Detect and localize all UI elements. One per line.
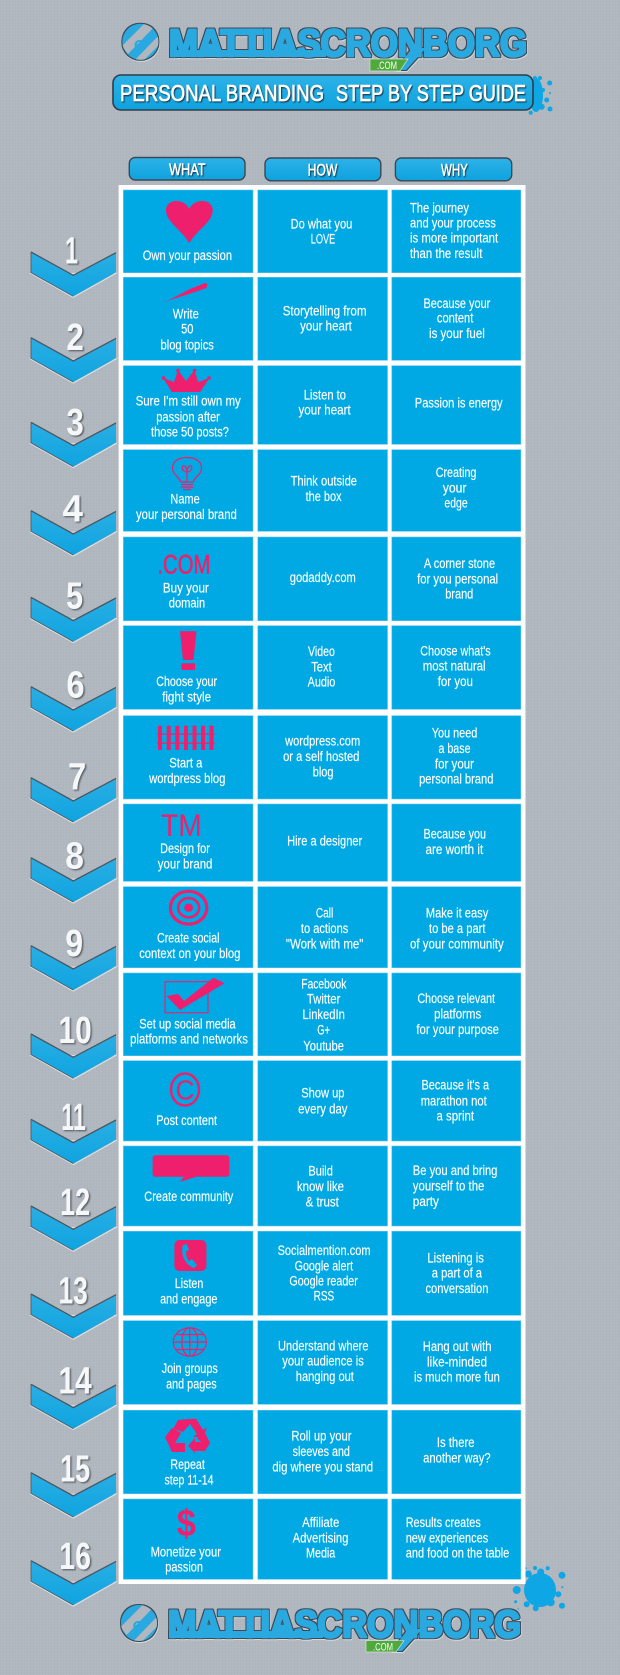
icon: crown xyxy=(162,369,211,392)
chevron 4 xyxy=(31,511,116,556)
why cell xyxy=(392,716,521,799)
how cell xyxy=(258,804,388,881)
how cell xyxy=(258,537,388,621)
column header: why: WHY xyxy=(441,162,468,180)
how cell: the box xyxy=(306,489,342,504)
what cell: domain xyxy=(169,596,205,611)
icon: heart xyxy=(166,201,213,243)
how cell: Youtube xyxy=(303,1039,344,1054)
why cell: for you personal xyxy=(417,571,498,586)
icon: pen stroke xyxy=(162,283,208,304)
why cell: Make it easy xyxy=(426,906,489,921)
how cell: sleeves and xyxy=(293,1444,350,1459)
how cell xyxy=(258,450,388,531)
number 6: 6 xyxy=(66,664,85,706)
how cell: Roll up your xyxy=(291,1429,352,1444)
why cell: is more important xyxy=(410,231,498,246)
how cell xyxy=(258,366,388,444)
icon: globe xyxy=(173,1328,206,1356)
how cell xyxy=(258,973,388,1056)
what cell: and pages xyxy=(166,1376,217,1391)
what cell: fight style xyxy=(162,690,211,704)
why cell: Is there xyxy=(437,1435,474,1450)
what cell: 50 xyxy=(181,322,193,337)
step 6 xyxy=(31,626,521,732)
why cell: Passion is energy xyxy=(415,395,503,410)
why cell xyxy=(392,366,521,444)
how cell: Build xyxy=(308,1164,333,1179)
what cell xyxy=(123,973,253,1056)
number 16: 16 xyxy=(59,1536,91,1578)
why cell: yourself to the xyxy=(413,1178,484,1193)
what cell: Name xyxy=(170,491,200,506)
icon: exclamation mark xyxy=(180,631,196,670)
how cell: Call xyxy=(316,905,333,920)
why cell: for your xyxy=(435,756,474,771)
how cell xyxy=(258,887,388,968)
number 14: 14 xyxy=(58,1360,92,1402)
step 10 xyxy=(31,973,521,1079)
what cell: Set up social media xyxy=(139,1016,236,1031)
bottom splash xyxy=(513,1566,566,1611)
what cell xyxy=(123,1321,253,1404)
step 4 xyxy=(31,450,521,556)
what cell xyxy=(123,1231,253,1315)
icon: dollar sign: $ xyxy=(177,1503,196,1545)
why cell: Choose relevant xyxy=(418,991,495,1006)
icon: TM: TM xyxy=(161,808,202,843)
why cell: to be a part xyxy=(429,921,486,936)
why cell: Results creates xyxy=(406,1515,481,1530)
why cell: Be you and bring xyxy=(413,1163,497,1178)
why cell: edge xyxy=(444,496,468,511)
how cell xyxy=(258,1410,388,1494)
chevron 7 xyxy=(31,778,116,823)
column header: what xyxy=(129,158,245,180)
how cell: Do what you xyxy=(291,216,352,231)
what cell: Post content xyxy=(156,1113,217,1128)
what cell: Start a xyxy=(169,755,203,770)
logo: bottom xyxy=(121,1599,521,1654)
why cell xyxy=(392,804,521,881)
how cell: Socialmention.com xyxy=(278,1243,370,1258)
title banner xyxy=(113,75,533,110)
how cell: hanging out xyxy=(296,1369,354,1384)
title text: STEP BY STEP GUIDE xyxy=(336,80,526,106)
how cell: your heart xyxy=(300,319,352,334)
why cell: new experiences xyxy=(406,1530,489,1545)
why cell: platforms xyxy=(434,1007,481,1022)
why cell: A corner stone xyxy=(424,556,495,571)
why cell: a sprint xyxy=(436,1108,474,1123)
logo .com badge xyxy=(370,59,408,72)
how cell: Hire a designer xyxy=(287,834,363,849)
how cell: Audio xyxy=(308,675,335,690)
number 2: 2 xyxy=(66,317,84,359)
how cell xyxy=(258,1231,388,1315)
what cell: Buy your xyxy=(163,580,209,595)
chevron 11 xyxy=(31,1119,116,1165)
why cell: conversation xyxy=(426,1281,488,1296)
what cell: Listen xyxy=(175,1276,203,1291)
what cell: platforms and networks xyxy=(130,1032,248,1047)
title text: PERSONAL BRANDING xyxy=(120,80,324,106)
how cell: your heart xyxy=(298,403,351,418)
how cell: Show up xyxy=(301,1085,344,1100)
what cell: passion after xyxy=(156,409,220,424)
why cell: Because you xyxy=(424,827,486,842)
why cell xyxy=(392,537,521,621)
how cell: Storytelling from xyxy=(283,303,366,318)
logo .com badge: .COM xyxy=(373,1642,393,1654)
how cell: to actions xyxy=(301,921,348,936)
icon: checkbox xyxy=(165,978,225,1013)
how cell: G+ xyxy=(317,1022,330,1037)
step 15 xyxy=(31,1410,521,1518)
what cell: Own your passion xyxy=(143,248,232,263)
what cell: Choose your xyxy=(156,674,217,689)
chevron 6 xyxy=(31,687,116,732)
how cell: RSS xyxy=(314,1289,334,1304)
why cell: for you xyxy=(438,674,473,689)
chevron 8 xyxy=(31,858,116,903)
how cell: Affiliate xyxy=(302,1515,339,1530)
chevron 15 xyxy=(31,1473,116,1518)
logo icon xyxy=(120,1604,158,1643)
what cell xyxy=(123,887,253,968)
why cell xyxy=(392,1410,521,1494)
how cell: Video xyxy=(308,644,335,659)
what cell xyxy=(123,804,253,881)
what cell: your brand xyxy=(158,856,212,871)
logo wordmark: MATTIASCRONBORG xyxy=(169,23,527,65)
how cell: blog xyxy=(313,764,333,779)
why cell xyxy=(392,1321,521,1404)
number 4: 4 xyxy=(62,489,83,531)
how cell: wordpress.com xyxy=(284,734,360,749)
why cell: content xyxy=(437,311,473,326)
how cell: & trust xyxy=(306,1194,339,1209)
why cell xyxy=(392,973,521,1056)
number 5: 5 xyxy=(66,575,83,617)
number 1: 1 xyxy=(65,230,78,272)
step 8 xyxy=(31,804,521,903)
what cell: Write xyxy=(173,307,199,322)
number 10: 10 xyxy=(58,1010,92,1052)
what cell: your personal brand xyxy=(136,507,237,522)
how cell: Google alert xyxy=(295,1258,353,1273)
why cell: like-minded xyxy=(427,1354,487,1369)
what cell xyxy=(123,1061,253,1141)
how cell xyxy=(258,277,388,360)
logo .com badge: .COM xyxy=(377,60,397,72)
number 15: 15 xyxy=(60,1449,90,1491)
why cell: Because your xyxy=(424,296,491,311)
what cell: context on your blog xyxy=(139,946,240,961)
what cell: those 50 posts? xyxy=(151,424,229,439)
logo icon: G xyxy=(134,37,146,54)
step 14 xyxy=(31,1321,521,1430)
how cell: know like xyxy=(297,1179,344,1194)
icon: light bulb xyxy=(172,458,202,490)
why cell xyxy=(392,887,521,968)
why cell: Choose what's xyxy=(420,643,491,658)
icon: .COM: .COM xyxy=(157,549,210,579)
logo wordmark: MATTIASCRONBORG xyxy=(168,1604,521,1646)
why cell: marathon not xyxy=(421,1093,487,1108)
title splash xyxy=(529,76,552,115)
how cell: Google reader xyxy=(289,1274,358,1289)
what cell: Repeat xyxy=(170,1457,205,1472)
how cell: LinkedIn xyxy=(302,1007,345,1022)
what cell xyxy=(123,1410,253,1494)
how cell: Understand where xyxy=(278,1338,368,1353)
what cell xyxy=(123,716,253,799)
why cell xyxy=(392,1061,521,1141)
title text xyxy=(120,80,526,106)
why cell: is your fuel xyxy=(429,326,485,341)
column header: why xyxy=(395,158,512,181)
what cell: and engage xyxy=(160,1291,217,1306)
why cell: is much more fun xyxy=(414,1370,500,1385)
why cell: Because it's a xyxy=(422,1078,489,1093)
chevron 9 xyxy=(31,946,116,991)
chevron 12 xyxy=(31,1206,116,1251)
logo icon xyxy=(121,22,160,62)
how cell xyxy=(258,626,388,709)
what cell xyxy=(123,537,253,621)
why cell: for your purpose xyxy=(416,1022,499,1037)
chevron 13 xyxy=(31,1294,116,1339)
chevron 3 xyxy=(31,422,116,468)
step 9 xyxy=(31,887,521,991)
why cell: personal brand xyxy=(419,772,493,787)
how cell xyxy=(258,190,388,273)
number 9: 9 xyxy=(65,923,83,965)
step 3 xyxy=(31,366,521,468)
what cell: Create social xyxy=(157,931,220,946)
what cell: Join groups xyxy=(162,1361,218,1376)
why cell: brand xyxy=(445,587,473,602)
why cell: Listening is xyxy=(427,1250,484,1265)
why cell: your xyxy=(443,480,467,495)
step 5 xyxy=(31,537,521,643)
number 3: 3 xyxy=(66,402,84,444)
icon: rail of bars xyxy=(157,726,215,750)
how cell xyxy=(258,1321,388,1404)
chevron 1 xyxy=(31,252,116,297)
why cell: The journey xyxy=(410,200,469,215)
column header: how xyxy=(265,158,381,181)
how cell xyxy=(258,1499,388,1579)
why cell: another way? xyxy=(423,1450,491,1465)
why cell: are worth it xyxy=(426,842,483,857)
number 12: 12 xyxy=(60,1182,90,1224)
step 16 xyxy=(31,1499,521,1606)
what cell: Sure I'm still own my xyxy=(136,394,241,409)
logo icon: G xyxy=(133,1618,144,1635)
icon: target xyxy=(170,891,207,924)
why cell xyxy=(392,1146,521,1226)
icon: copyright: C xyxy=(176,1074,194,1106)
how cell: Media xyxy=(306,1546,336,1561)
chevron 5 xyxy=(31,597,116,643)
logo: top xyxy=(122,18,527,72)
number 7: 7 xyxy=(68,756,86,798)
how cell: godaddy.com xyxy=(290,570,356,585)
what cell: Monetize your xyxy=(151,1544,221,1559)
how cell: Advertising xyxy=(293,1530,348,1545)
how cell: Twitter xyxy=(307,992,341,1007)
chevron 10 xyxy=(31,1034,116,1079)
icon: recycle xyxy=(165,1418,210,1453)
what cell xyxy=(123,450,253,531)
why cell: a part of a xyxy=(432,1266,482,1281)
what cell xyxy=(123,277,253,360)
step 11 xyxy=(31,1061,521,1165)
why cell xyxy=(392,277,521,360)
what cell: wordpress blog xyxy=(148,771,225,786)
why cell: party xyxy=(413,1194,439,1209)
column header: how: HOW xyxy=(308,162,338,180)
chevron 14 xyxy=(31,1384,116,1430)
why cell: You need xyxy=(432,725,477,740)
what cell xyxy=(123,190,253,273)
how cell xyxy=(258,716,388,799)
why cell xyxy=(392,450,521,531)
why cell: most natural xyxy=(423,659,486,674)
how cell: every day xyxy=(298,1101,348,1116)
step 12 xyxy=(31,1146,521,1251)
how cell: your audience is xyxy=(282,1354,364,1369)
step 7 xyxy=(31,716,521,823)
what cell: blog topics xyxy=(160,337,214,352)
what cell: Create community xyxy=(144,1189,233,1204)
how cell: Facebook xyxy=(301,976,347,991)
why cell: of your community xyxy=(410,936,504,951)
number 11: 11 xyxy=(61,1097,86,1139)
table panel xyxy=(119,185,525,1584)
what cell xyxy=(123,1499,253,1579)
why cell: and your process xyxy=(410,216,496,231)
what cell xyxy=(123,366,253,444)
chevron 2 xyxy=(31,338,116,383)
how cell: Think outside xyxy=(291,474,357,489)
why cell xyxy=(392,1499,521,1579)
what cell: step 11-14 xyxy=(164,1472,214,1487)
why cell: Creating xyxy=(436,465,476,480)
why cell xyxy=(392,626,521,709)
how cell: dig where you stand xyxy=(272,1459,373,1474)
what cell xyxy=(123,626,253,709)
what cell: passion xyxy=(165,1560,203,1575)
step 13 xyxy=(31,1231,521,1339)
how cell xyxy=(258,1146,388,1226)
how cell: "Work with me" xyxy=(286,936,364,951)
how cell: LOVE xyxy=(311,232,335,247)
number 8: 8 xyxy=(65,835,84,877)
icon: phone xyxy=(174,1240,206,1271)
step 1 xyxy=(31,190,521,297)
column header: what: WHAT xyxy=(169,161,206,179)
why cell: a base xyxy=(438,741,470,756)
chevron 16 xyxy=(31,1561,116,1606)
what cell xyxy=(123,1146,253,1226)
how cell: or a self hosted xyxy=(283,749,359,764)
how cell: Text xyxy=(311,659,332,674)
why cell xyxy=(392,190,521,273)
why cell xyxy=(392,1231,521,1315)
what cell: Design for xyxy=(160,841,210,856)
why cell: and food on the table xyxy=(406,1546,509,1561)
why cell: Hang out with xyxy=(423,1339,492,1354)
step 2 xyxy=(31,277,521,383)
icon: speech bubble xyxy=(153,1155,229,1182)
why cell: than the result xyxy=(410,246,483,261)
how cell: Listen to xyxy=(304,387,346,402)
how cell xyxy=(258,1061,388,1141)
number 13: 13 xyxy=(58,1270,88,1312)
